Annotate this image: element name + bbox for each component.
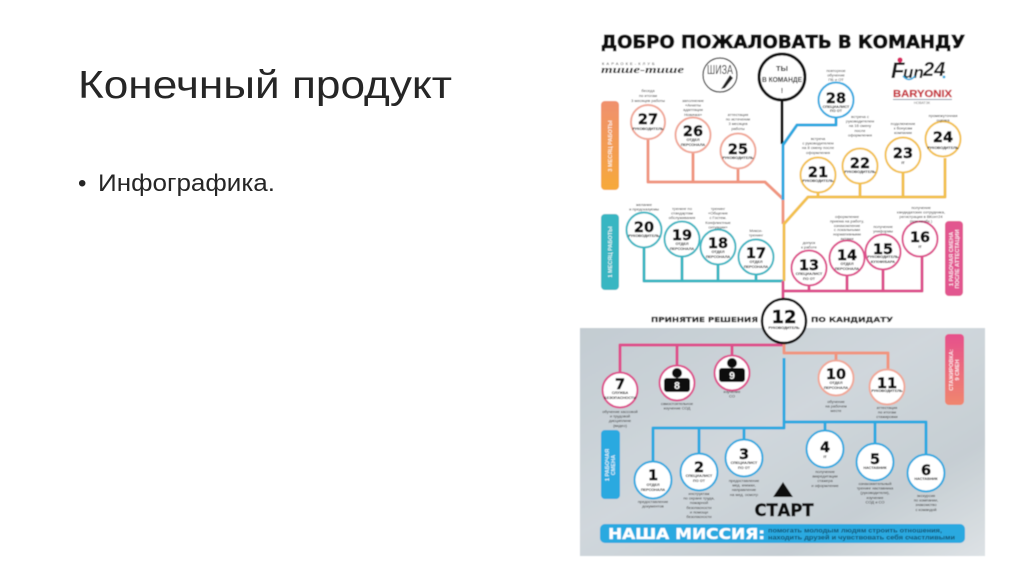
node 11: РУКОВОДИТЕЛЬ [871, 389, 903, 393]
decision label right: ПО КАНДИДАТУ [811, 316, 894, 324]
node 17 [738, 240, 774, 274]
caption 27: беседа [641, 88, 655, 93]
node: you are in the team: В КОМАНДЕ [762, 75, 802, 84]
caption 3: предоставление [729, 478, 760, 483]
caption 3: направление [732, 487, 757, 492]
caption 6: знакомство [915, 502, 937, 507]
node 7: 7 [615, 377, 625, 393]
caption 11: по итогам [878, 410, 896, 415]
caption 10: месте [830, 408, 842, 413]
node 25: РУКОВОДИТЕЛЬ [722, 156, 754, 160]
node 11: 11 [877, 376, 897, 392]
node 18: ОТДЕЛ [711, 250, 725, 254]
node 6: НАСТАВНИК [914, 477, 938, 481]
node 27: 27 [638, 112, 658, 128]
logo: fun24: un [903, 63, 924, 82]
node 20: 20 [634, 220, 654, 236]
caption 7: обучение кассовой [602, 409, 638, 414]
node 2: 2 [694, 460, 704, 476]
caption 6: с командой [915, 507, 937, 512]
node 23: IT [901, 161, 905, 165]
caption 18: Конфликтные [705, 220, 732, 225]
slide title: Конечный продукт [78, 64, 452, 107]
caption 1: предоставление [638, 499, 669, 504]
node 2: ПО ОТ [693, 479, 706, 483]
caption 3: мед. книжки, [732, 483, 756, 488]
node 21 [800, 158, 836, 192]
caption 22: встреча с [851, 114, 869, 119]
node 10 [818, 360, 854, 396]
node 6 [908, 454, 944, 492]
node 19: ОТДЕЛ [675, 242, 689, 246]
node 10: ОТДЕЛ [829, 381, 843, 385]
node 12: РУКОВОДИТЕЛЬ [768, 326, 800, 330]
node 3: 3 [739, 447, 749, 463]
caption 16: кандидатских сотрудника, [897, 210, 945, 214]
start label: СТАРТ [754, 501, 814, 521]
logo: fun24 [891, 57, 945, 83]
caption 22: руководителем [846, 119, 874, 124]
node 22: РУКОВОДИТЕЛЬ [844, 170, 876, 174]
node 1: 1 [648, 468, 658, 484]
caption 17: Микси- [750, 228, 763, 233]
caption 27: по итогам [639, 93, 657, 98]
caption 26: Новичка» [684, 112, 703, 117]
node 16: 16 [910, 230, 930, 246]
caption 14: нормативными [833, 232, 861, 237]
caption 19: тренинг по [672, 206, 693, 211]
caption 2: безопасности [686, 514, 712, 519]
side tag: first shift: СМЕНА [611, 455, 617, 475]
caption 24: оценка [937, 118, 950, 123]
caption 14: приема на работу, [830, 218, 864, 223]
caption 16: (при необх.) [910, 218, 933, 224]
caption 27: 3 месяцев работы [631, 98, 665, 103]
logo: shiza [703, 58, 737, 92]
caption 19: обслуживания [669, 215, 695, 220]
node 14 [830, 240, 864, 276]
node 2: СПЕЦИАЛИСТ [686, 474, 713, 478]
infographic heading: ДОБРО ПОЖАЛОВАТЬ В КОМАНДУ [601, 32, 965, 53]
caption 28: ПБ и ОТ [828, 77, 844, 82]
side tag: internship [945, 334, 964, 405]
node 18: ПЕРСОНАЛА [706, 255, 730, 259]
node 9 with reader icon: 9 [729, 371, 735, 382]
node 28: ПО ОТ [830, 109, 843, 113]
caption 18: с Гостем. [709, 215, 727, 220]
node 15 [866, 234, 900, 270]
node 18 [700, 230, 736, 264]
node 5: НАСТАВНИК [863, 466, 887, 470]
caption 4: и оформление [811, 483, 839, 488]
caption 23: подключение [891, 121, 916, 126]
logo: fun24: F [891, 58, 905, 83]
mission banner [600, 524, 965, 543]
connectors [620, 100, 945, 461]
side tag: internship: 9 СМЕН [955, 359, 961, 381]
caption 8: изучение СОД [664, 406, 691, 411]
caption 6: экскурсия [917, 493, 935, 498]
node 15: РУКОВОДИТЕЛЬ [867, 255, 899, 259]
node 26: ОТДЕЛ [686, 138, 700, 142]
caption 25: 3 месяцев [728, 121, 748, 126]
caption 16: регистрация в ВКонт24 [899, 214, 943, 219]
logo: baryonix: BARYONIX [893, 89, 952, 100]
caption 14: с локальными [834, 227, 860, 232]
icon: start triangle [773, 482, 793, 497]
node 24 [926, 122, 960, 156]
node 4: IT [823, 455, 827, 459]
caption 11: аттестация [877, 405, 897, 410]
caption 2: пожарной [690, 500, 708, 505]
caption 28: обучение [827, 73, 845, 78]
node 20 [626, 212, 662, 248]
caption 22: оформления [848, 132, 872, 137]
side tag: 3 month: 3 МЕСЯЦ РАБОТЫ [608, 120, 614, 172]
node 13: 13 [799, 258, 819, 274]
mission banner: помогать молодым людям строить отношения, [768, 528, 942, 534]
node 9 with reader icon [714, 356, 750, 390]
caption 2: инструктаж [689, 491, 710, 496]
caption 7: дисциплине [609, 418, 632, 423]
caption 19: стандартам [671, 211, 693, 216]
caption 5: изучение [866, 495, 884, 500]
caption 25: работы [731, 126, 745, 131]
caption 22: на 16 смену [849, 123, 871, 128]
caption 21: встреча [811, 136, 826, 141]
node 13: СПЕЦИАЛИСТ [796, 272, 823, 276]
caption 2: по охране труда, [683, 496, 715, 501]
caption 28: повторное [826, 68, 846, 73]
node 21: РУКОВОДИТЕЛЬ [802, 179, 834, 183]
slide bullet text: • [78, 170, 86, 197]
caption 7: и трудовой [610, 414, 630, 419]
node 26: 26 [683, 124, 703, 140]
logo: karaoke club: тише-тише [601, 65, 685, 76]
caption 20: и предсказуемы [629, 207, 659, 212]
caption 4: получение [815, 469, 836, 474]
node 26: ПЕРСОНАЛА [681, 143, 705, 147]
node 21: 21 [808, 165, 828, 181]
node 14: 14 [837, 248, 857, 264]
side tag: first shift [601, 430, 620, 499]
node: you are in the team: ТЫ [776, 64, 788, 73]
node 22 [842, 148, 878, 184]
caption 23: компании [894, 130, 912, 135]
node 1: ПЕРСОНАЛА [641, 488, 665, 492]
node 12: 12 [771, 307, 797, 328]
node 18: 18 [708, 236, 728, 252]
caption 16: получение [911, 205, 932, 210]
node 25 [720, 134, 756, 168]
node 7: СЛУЖБА [612, 391, 628, 395]
node 28 [818, 82, 854, 118]
decision label left: ПРИНЯТИЕ РЕШЕНИЯ [651, 316, 758, 324]
node 15: 15 [873, 242, 893, 258]
node 16 [902, 222, 938, 256]
caption 5: СОД и СО [866, 499, 884, 504]
caption 26: «Анкеты [685, 103, 701, 108]
caption 3: на мед. осмотр [730, 492, 759, 497]
node 22: 22 [850, 156, 870, 172]
side tag: 1 month: 1 МЕСЯЦ РАБОТЫ [608, 226, 614, 278]
caption 13: к работе [801, 245, 818, 250]
caption 17: тренинг [749, 233, 764, 238]
node 17: ОТДЕЛ [749, 260, 763, 264]
caption 21: оформления [806, 150, 830, 155]
node 5: 5 [870, 452, 880, 468]
node 2 [680, 454, 718, 490]
caption 21: с руководителем [802, 141, 834, 146]
caption 22: после [855, 128, 866, 133]
node 19: ПЕРСОНАЛА [670, 247, 694, 251]
panel: grey lower background [580, 328, 985, 556]
logo: fun24: 24 [922, 59, 945, 81]
node 17: 17 [746, 246, 766, 262]
caption 5: ознакомительный [858, 481, 892, 486]
node: you are in the team: ! [781, 86, 783, 95]
caption 9: изучение [724, 389, 741, 394]
mission banner: НАША МИССИЯ: [608, 525, 765, 543]
side tag: first shift after attestation: 1 РАБОЧАЯ СМЕНА [949, 232, 955, 286]
caption 5: (руководителя), [860, 490, 890, 495]
caption 10: обучение [827, 399, 845, 404]
caption 20: желание [636, 202, 653, 207]
node: you are in the team [759, 54, 805, 100]
caption 18: тренинг [711, 206, 726, 211]
node 7: БЕЗОПАСНОСТИ [604, 396, 636, 400]
caption 4: стажера [817, 478, 833, 483]
side tag: first shift after attestation: ПОСЛЕ АТТЕСТАЦИИ [955, 230, 961, 288]
mission banner: находить друзей и чувствовать себя счастливыми [768, 534, 955, 542]
node 15: КУХНИ/БАРА [871, 260, 895, 264]
side tag: first shift: 1 РАБОЧАЯ [605, 449, 611, 481]
side tag: 1 month [601, 214, 619, 290]
node 27 [631, 105, 665, 139]
node 12 [762, 299, 806, 343]
caption 2: безопасности [686, 505, 712, 510]
node 13: ПО ОТ [803, 277, 816, 281]
node 10: ПЕРСОНАЛА [824, 386, 848, 390]
logo: baryonix [893, 89, 952, 105]
caption 8: самостоятельное [661, 401, 694, 406]
infographic [580, 18, 985, 556]
node 23 [886, 138, 920, 172]
caption 24: промежуточная [929, 113, 957, 118]
node 23: 23 [893, 146, 913, 162]
node 7 [602, 372, 638, 408]
node 28: 28 [826, 91, 846, 107]
node 6: 6 [921, 463, 931, 479]
node 4: 4 [820, 440, 830, 456]
node 1: ОТДЕЛ [646, 483, 660, 487]
node 5 [856, 444, 894, 480]
caption 26: заполнение [682, 98, 705, 103]
caption 1: документов [642, 504, 664, 509]
logo: karaoke club: КАРАОКЕ-КЛУБ [602, 61, 657, 66]
caption 14: оформление [835, 214, 860, 219]
caption 15: униформы [873, 229, 893, 234]
node 26 [676, 118, 710, 152]
caption 7: (видео) [613, 423, 628, 428]
node 14: ПЕРСОНАЛА [835, 267, 859, 271]
node 3: СПЕЦИАЛИСТ [731, 461, 758, 465]
node 10: 10 [826, 367, 846, 383]
caption 11: стажировки [876, 414, 898, 419]
logo: shiza: ШИЗА [707, 62, 733, 77]
caption 2: и помощи [690, 509, 708, 514]
node 11 [870, 370, 904, 404]
caption 21: на 8 смену после [802, 145, 835, 150]
node 4 [806, 430, 844, 468]
caption 9: СО [729, 394, 735, 399]
node 20: РУКОВОДИТЕЛЬ [628, 234, 660, 238]
node 28: СПЕЦИАЛИСТ [823, 105, 850, 109]
caption 4: аккредитации [812, 474, 838, 479]
side tag: first shift after attestation [945, 221, 963, 296]
node 3 [726, 440, 762, 476]
node 19: 19 [672, 228, 692, 244]
caption 6: по компании, [914, 498, 938, 503]
node 24: РУКОВОДИТЕЛЬ [927, 146, 959, 150]
panel: white upper background [580, 18, 985, 328]
node 17: ПЕРСОНАЛА [744, 265, 768, 269]
node 1 [634, 462, 672, 498]
caption 14: ознакомление [834, 223, 861, 228]
node 14: ОТДЕЛ [840, 262, 854, 266]
logo: karaoke club [601, 61, 685, 76]
node 13 [792, 250, 826, 286]
node 27: РУКОВОДИТЕЛЬ [632, 127, 664, 131]
node 8 with reader icon [660, 366, 694, 400]
side tag: 3 month [601, 101, 619, 190]
logo: baryonix: НОВАТЭК [914, 101, 931, 105]
slide bullet text: Инфографика. [98, 170, 275, 197]
caption 26: адаптации [683, 107, 703, 112]
node 24: 24 [933, 130, 953, 146]
caption 5: тренинг наставника [857, 486, 894, 491]
node 19 [664, 222, 700, 256]
caption 25: по истечении [726, 117, 750, 122]
caption 13: допуск [803, 240, 815, 245]
caption 25: аттестация [728, 112, 748, 117]
node 3: ПО ОТ [738, 466, 751, 470]
caption 23: к бонусам [894, 126, 913, 131]
node 16: IT [918, 245, 922, 249]
caption 10: на рабочем [825, 404, 847, 409]
node 8 with reader icon: 8 [674, 381, 680, 392]
node 25: 25 [728, 142, 748, 158]
caption 18: «Общение [708, 211, 729, 216]
caption 18: ситуации» [708, 224, 728, 229]
caption 15: получение [873, 224, 894, 229]
caption 14: актами [840, 236, 854, 241]
side tag: internship: СТАЖИРОВКА: [949, 349, 955, 391]
